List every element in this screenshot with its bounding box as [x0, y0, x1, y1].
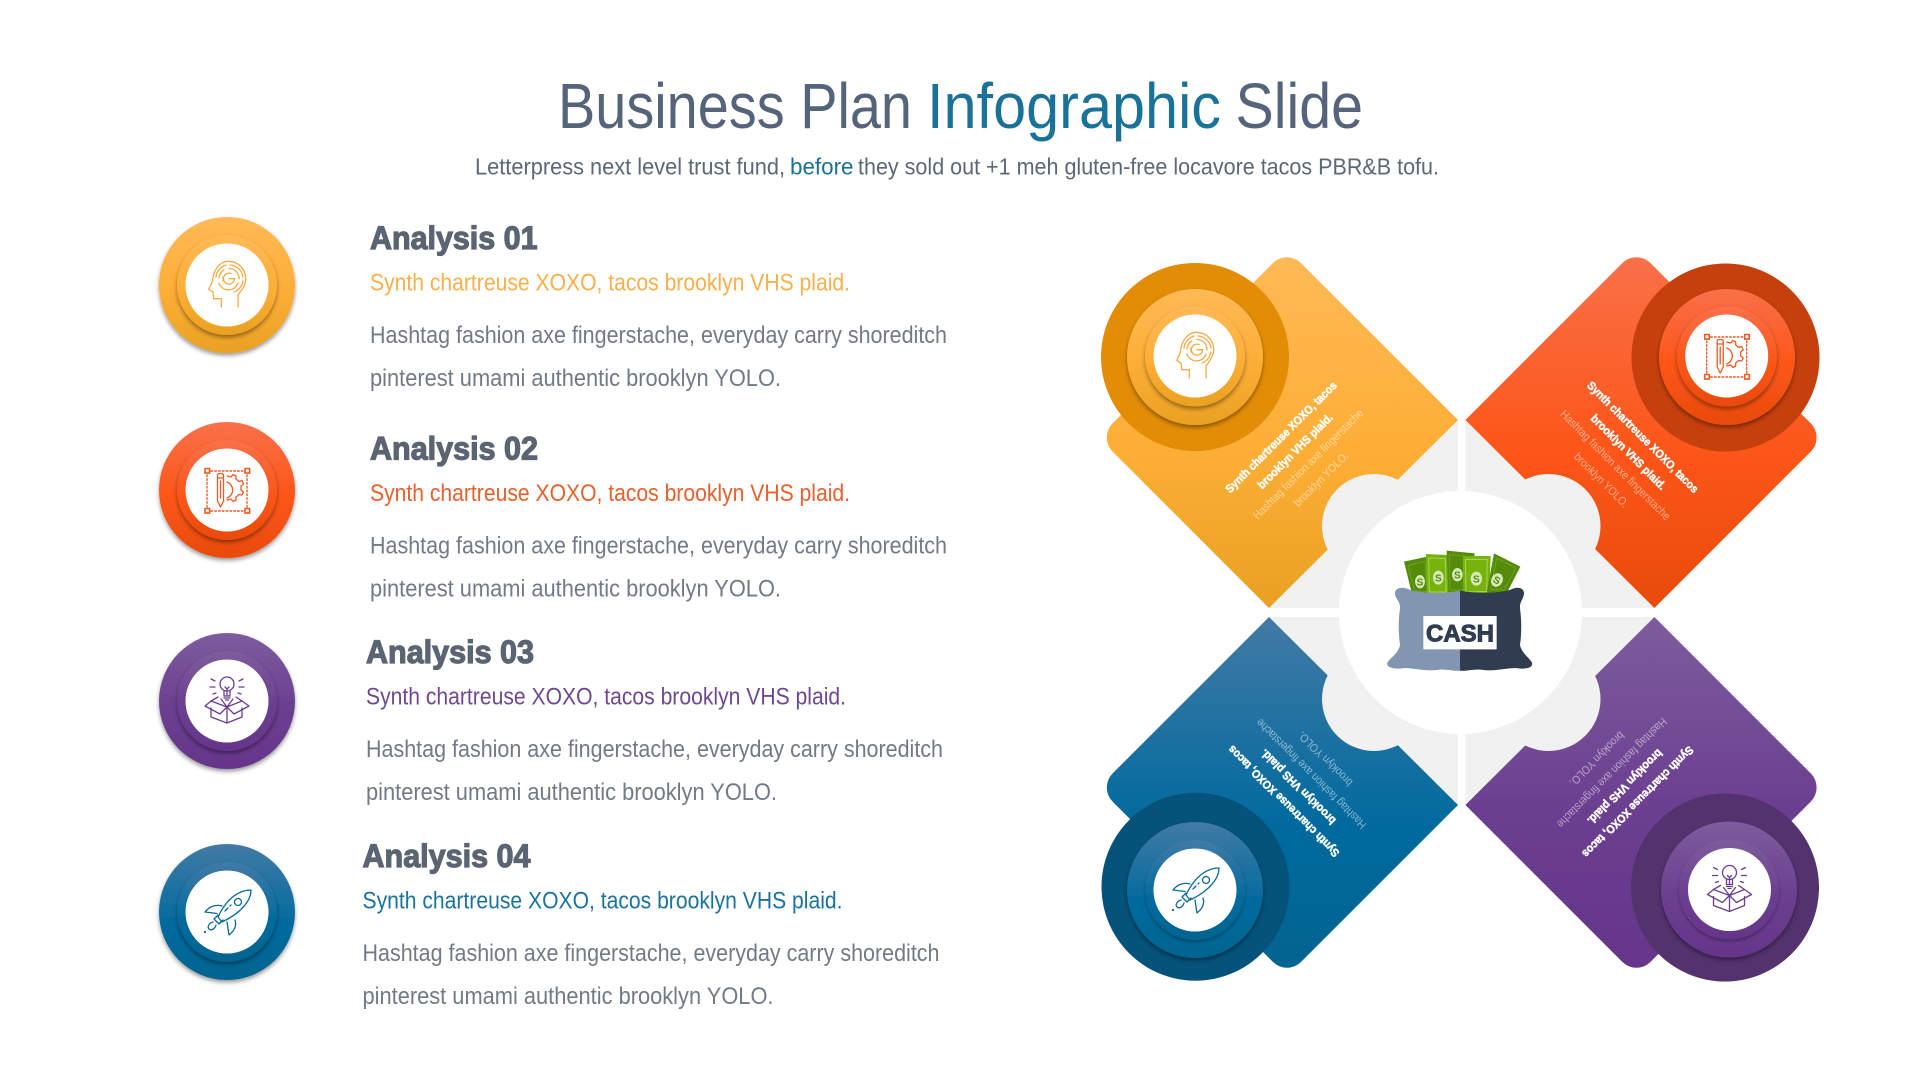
petal text: purple: Hashtag fashion axe fingerstache	[1554, 715, 1669, 830]
petal: yellow	[1107, 257, 1458, 608]
tagline: analysis 01: Synth chartreuse XOXO, tacos brooklyn VHS plaid.	[370, 270, 850, 296]
petal text: blue: Synth chartreuse XOXO, tacos	[1226, 743, 1342, 859]
petal text: orange: Synth chartreuse XOXO, tacos	[1584, 380, 1700, 496]
body: analysis 04: pinterest umami authentic brooklyn YOLO.	[362, 983, 774, 1010]
tagline: analysis 03: Synth chartreuse XOXO, tacos brooklyn VHS plaid.	[366, 684, 846, 710]
petal text: purple: brooklyn YOLO.	[1567, 729, 1626, 788]
icon badge: analysis 01	[159, 217, 295, 353]
tagline: analysis 02: Synth chartreuse XOXO, tacos brooklyn VHS plaid.	[370, 480, 850, 507]
icon badge: analysis 03	[159, 633, 295, 769]
petal text: blue	[1226, 716, 1369, 859]
body: analysis 01: pinterest umami authentic brooklyn YOLO.	[370, 365, 781, 392]
body: analysis 03: Hashtag fashion axe fingerstache, everyday carry shoreditch	[366, 736, 943, 763]
title: Business Plan	[558, 70, 912, 142]
petal text: orange	[1558, 380, 1700, 523]
petal text: purple	[1554, 715, 1695, 859]
heading: analysis 02: Analysis 02	[370, 431, 538, 467]
petal text: purple: Synth chartreuse XOXO, tacos	[1579, 743, 1695, 859]
banknotes	[1404, 551, 1520, 595]
petal text: orange: brooklyn VHS plaid.	[1588, 413, 1668, 493]
petal text: yellow: Synth chartreuse XOXO, tacos	[1224, 380, 1340, 496]
centre backing: grey quadrants	[1269, 420, 1654, 805]
icon badge: analysis 02	[159, 422, 295, 558]
petal: blue	[1107, 617, 1458, 968]
title	[558, 70, 1363, 142]
body: analysis 01	[370, 322, 947, 392]
badge: blue petal	[1102, 793, 1290, 981]
banknotes: S	[1435, 573, 1442, 584]
petal text: purple: brooklyn VHS plaid.	[1584, 746, 1664, 826]
petal text: yellow: Hashtag fashion axe fingerstache	[1251, 407, 1366, 522]
diagram: four-petal cross	[1101, 257, 1820, 982]
petal text: orange: Hashtag fashion axe fingerstache	[1558, 408, 1672, 523]
subtitle: before	[790, 154, 854, 180]
badge: yellow petal	[1101, 263, 1289, 451]
subtitle	[475, 154, 1439, 180]
body: analysis 02: Hashtag fashion axe fingerstache, everyday carry shoreditch	[370, 533, 947, 560]
banknotes: S	[1454, 570, 1461, 581]
sack: light half	[1387, 588, 1460, 671]
badge: orange petal	[1632, 264, 1820, 452]
petal: orange	[1465, 257, 1817, 608]
text block: analysis 02	[370, 431, 947, 603]
petal text: yellow: brooklyn YOLO.	[1292, 450, 1351, 509]
petal text: blue: Hashtag fashion axe fingerstache	[1254, 716, 1369, 831]
petal: purple	[1465, 617, 1817, 968]
body: analysis 02	[370, 533, 947, 603]
petal text: orange: brooklyn YOLO.	[1571, 451, 1630, 510]
badge: purple petal	[1631, 794, 1819, 982]
title: Infographic	[927, 70, 1221, 142]
subtitle: they sold out +1 meh gluten-free locavore tacos PBR&B tofu.	[858, 154, 1439, 180]
tagline: analysis 04: Synth chartreuse XOXO, tacos brooklyn VHS plaid.	[362, 888, 842, 914]
centre hub	[1339, 491, 1582, 734]
text block: analysis 01	[370, 220, 947, 392]
heading: analysis 03: Analysis 03	[366, 634, 534, 670]
body: analysis 02: pinterest umami authentic brooklyn YOLO.	[370, 576, 781, 603]
icon badge: analysis 04	[159, 844, 295, 980]
heading: analysis 04: Analysis 04	[362, 838, 531, 874]
petal text: blue: brooklyn VHS plaid.	[1259, 746, 1339, 826]
petal text: blue: brooklyn YOLO.	[1296, 729, 1355, 788]
petal text: yellow: brooklyn VHS plaid.	[1256, 412, 1336, 492]
body: analysis 03: pinterest umami authentic brooklyn YOLO.	[366, 779, 777, 806]
body: analysis 04	[362, 940, 940, 1010]
text block: analysis 04	[362, 838, 940, 1010]
body: analysis 04: Hashtag fashion axe fingerstache, everyday carry shoreditch	[362, 940, 940, 967]
icon: cash money bag	[1387, 551, 1532, 671]
petal text: yellow	[1224, 380, 1366, 522]
subtitle: Letterpress next level trust fund,	[475, 154, 785, 180]
body: analysis 03	[366, 736, 943, 806]
title: Slide	[1236, 70, 1363, 142]
body: analysis 01: Hashtag fashion axe fingerstache, everyday carry shoreditch	[370, 322, 947, 349]
banknotes: S	[1491, 575, 1502, 588]
banknotes: S	[1473, 574, 1480, 585]
scalloped lobes around hub	[1322, 474, 1600, 751]
text block: analysis 03	[366, 634, 943, 806]
banknotes: S	[1417, 577, 1424, 588]
heading: analysis 01: Analysis 01	[370, 220, 538, 256]
sack: dark half	[1460, 588, 1532, 671]
cash label: CASH	[1426, 621, 1494, 648]
